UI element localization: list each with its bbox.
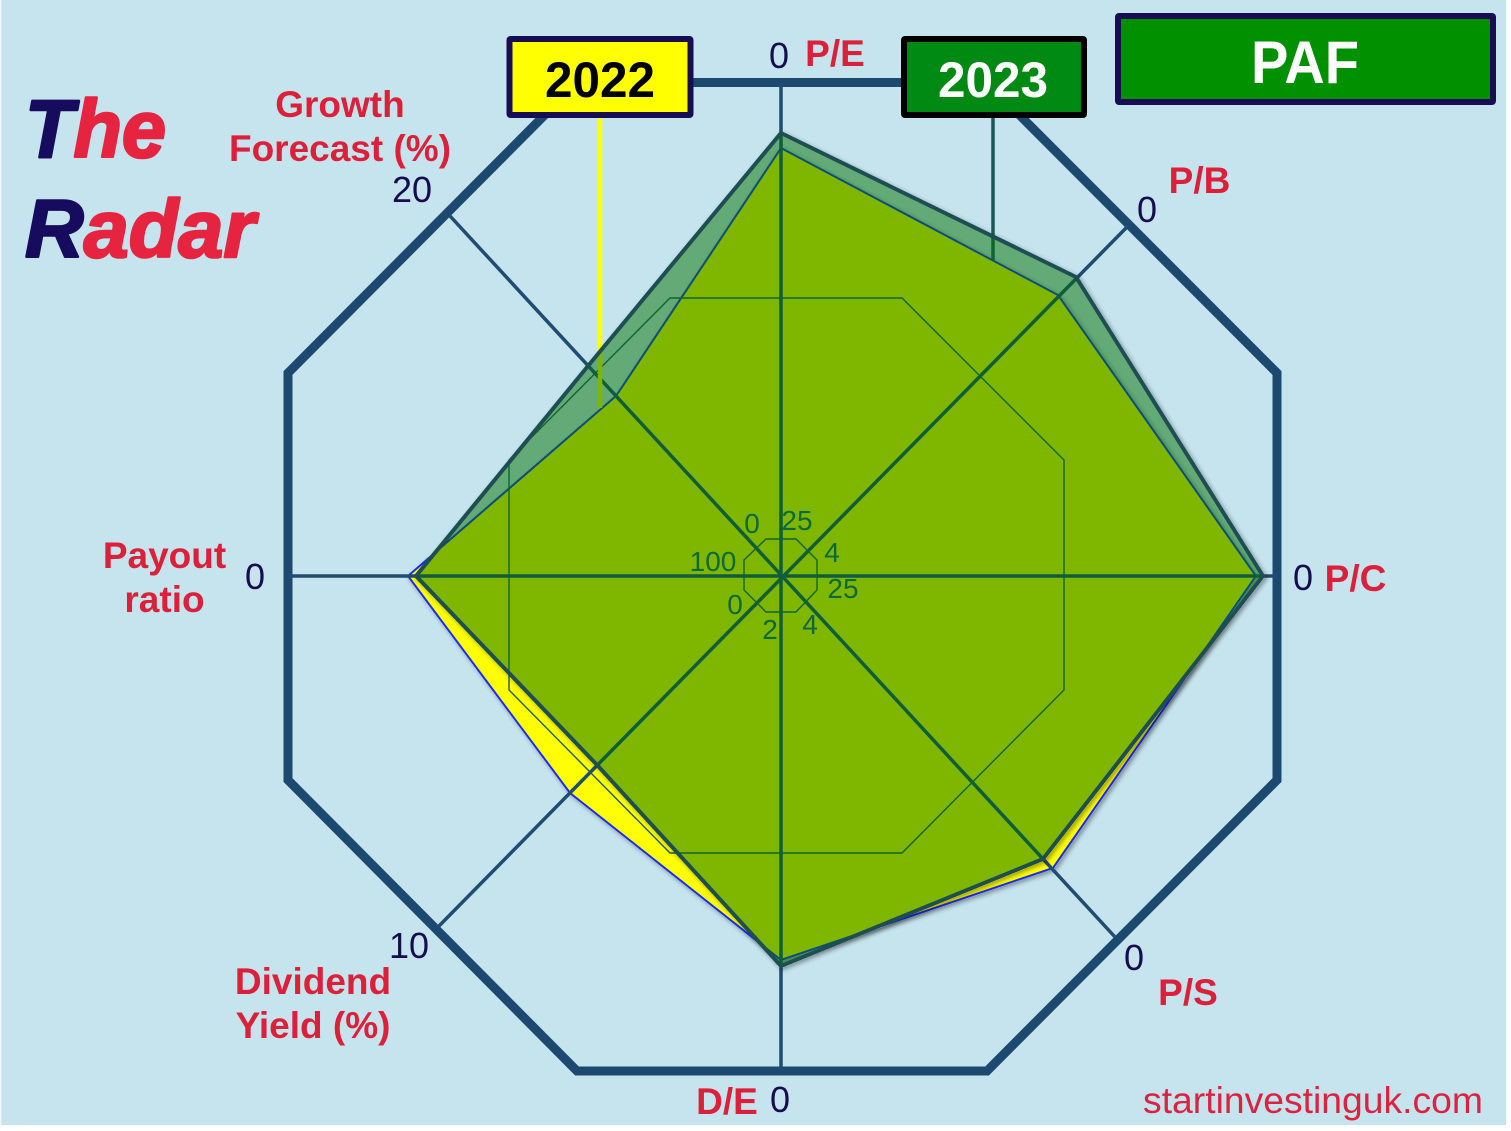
axis label: Dividend Yield (235, 961, 391, 1046)
company ticker box (1118, 16, 1493, 102)
mid range octagon (509, 298, 1064, 853)
2023 data polygon (416, 133, 1263, 966)
outer scale values: 0 (1124, 937, 1144, 978)
outer scale values: 0 (1293, 557, 1313, 598)
outer octagon frame (288, 82, 1277, 1071)
title line 1: The (25, 84, 166, 175)
source URL: startinvestinguk.com (1143, 1079, 1483, 1121)
axis label: P/E: P/E (805, 33, 865, 74)
outer scale values: 0 (245, 556, 265, 597)
axis label: Payout ratio (103, 535, 226, 620)
outer scale values: 10 (389, 925, 429, 966)
axis label: Dividend Yield: Yield (%) (236, 1005, 390, 1046)
axis label: Dividend Yield: Dividend (235, 961, 391, 1002)
axis label: P/B: P/B (1169, 160, 1230, 201)
2022 legend box (510, 39, 690, 115)
2023 legend box: 2023 (938, 52, 1048, 108)
inner scale values (690, 505, 859, 645)
2023 pointer line (991, 117, 995, 260)
outer scale values: 20 (392, 169, 432, 210)
axis label: P/S: P/S (1158, 972, 1218, 1013)
title: The Radar (25, 84, 259, 275)
axis label: Growth Forecast (229, 84, 451, 169)
inner scale values: 0 (727, 589, 743, 620)
inner scale values: 25 (827, 573, 859, 604)
axis label: D/E: D/E (696, 1081, 758, 1122)
outer scale values: 0 (770, 1079, 790, 1120)
inner scale values: 4 (824, 537, 840, 568)
outer scale values (245, 35, 1313, 1120)
axis label: Growth Forecast: Forecast (%) (229, 128, 451, 169)
inner scale values: 0 (744, 508, 760, 539)
company ticker box: PAF (1251, 29, 1359, 96)
inner scale values: 100 (690, 546, 736, 577)
outer scale values: 0 (769, 35, 789, 76)
axis label: Growth Forecast: Growth (275, 84, 405, 125)
radar spokes (288, 82, 1277, 1071)
inner scale values: 25 (781, 505, 813, 536)
outer scale values: 0 (1137, 189, 1157, 230)
inner scale values: 4 (802, 609, 818, 640)
2022 pointer line (598, 117, 602, 408)
inner scale values: 2 (762, 614, 778, 645)
2023 legend box (904, 39, 1084, 115)
inner range octagon (744, 539, 817, 612)
title line 2: Radar (25, 184, 259, 275)
axis label: Payout ratio: Payout (103, 535, 226, 576)
2022 data polygon (408, 148, 1256, 960)
2022 legend box: 2022 (545, 52, 655, 108)
axis label: P/C: P/C (1325, 558, 1386, 599)
axis label: Payout ratio: ratio (124, 579, 205, 620)
